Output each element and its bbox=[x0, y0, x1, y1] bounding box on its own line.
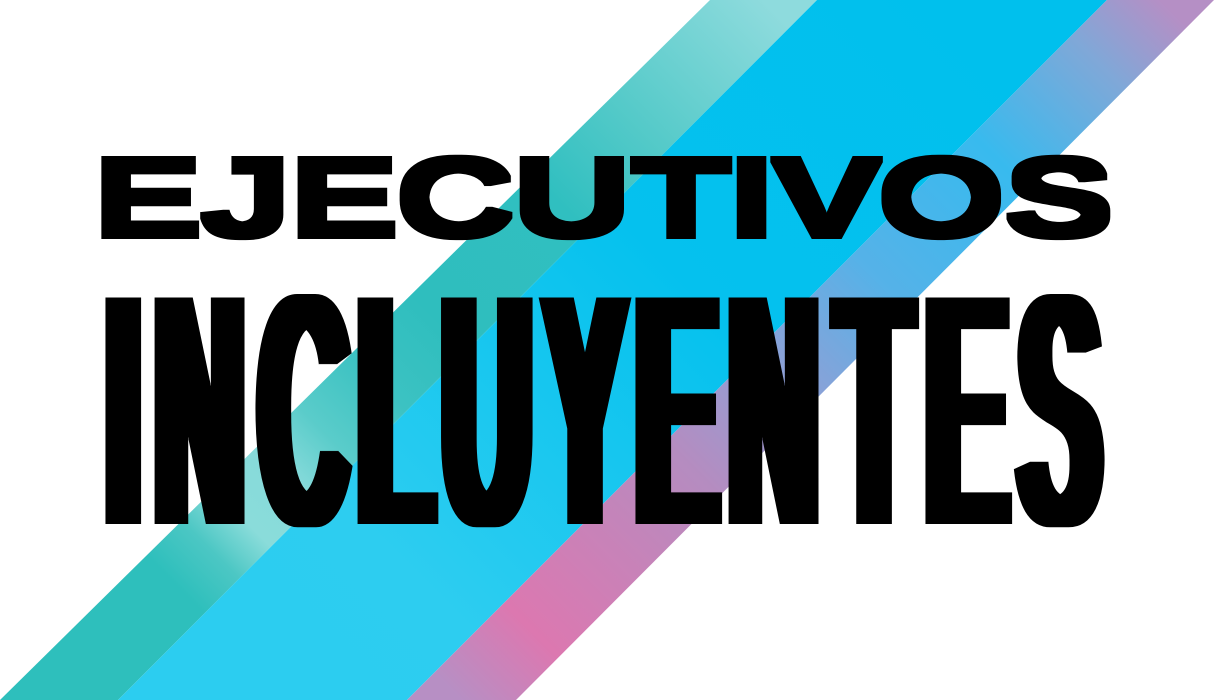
band: pink to blue diagonal stripe bbox=[407, 0, 1214, 700]
heading: INCLUYENTES: INCLUYENTES bbox=[106, 221, 1100, 599]
heading: EJECUTIVOS: EJECUTIVOS bbox=[93, 135, 1114, 260]
band: teal diagonal stripe bbox=[0, 0, 817, 700]
